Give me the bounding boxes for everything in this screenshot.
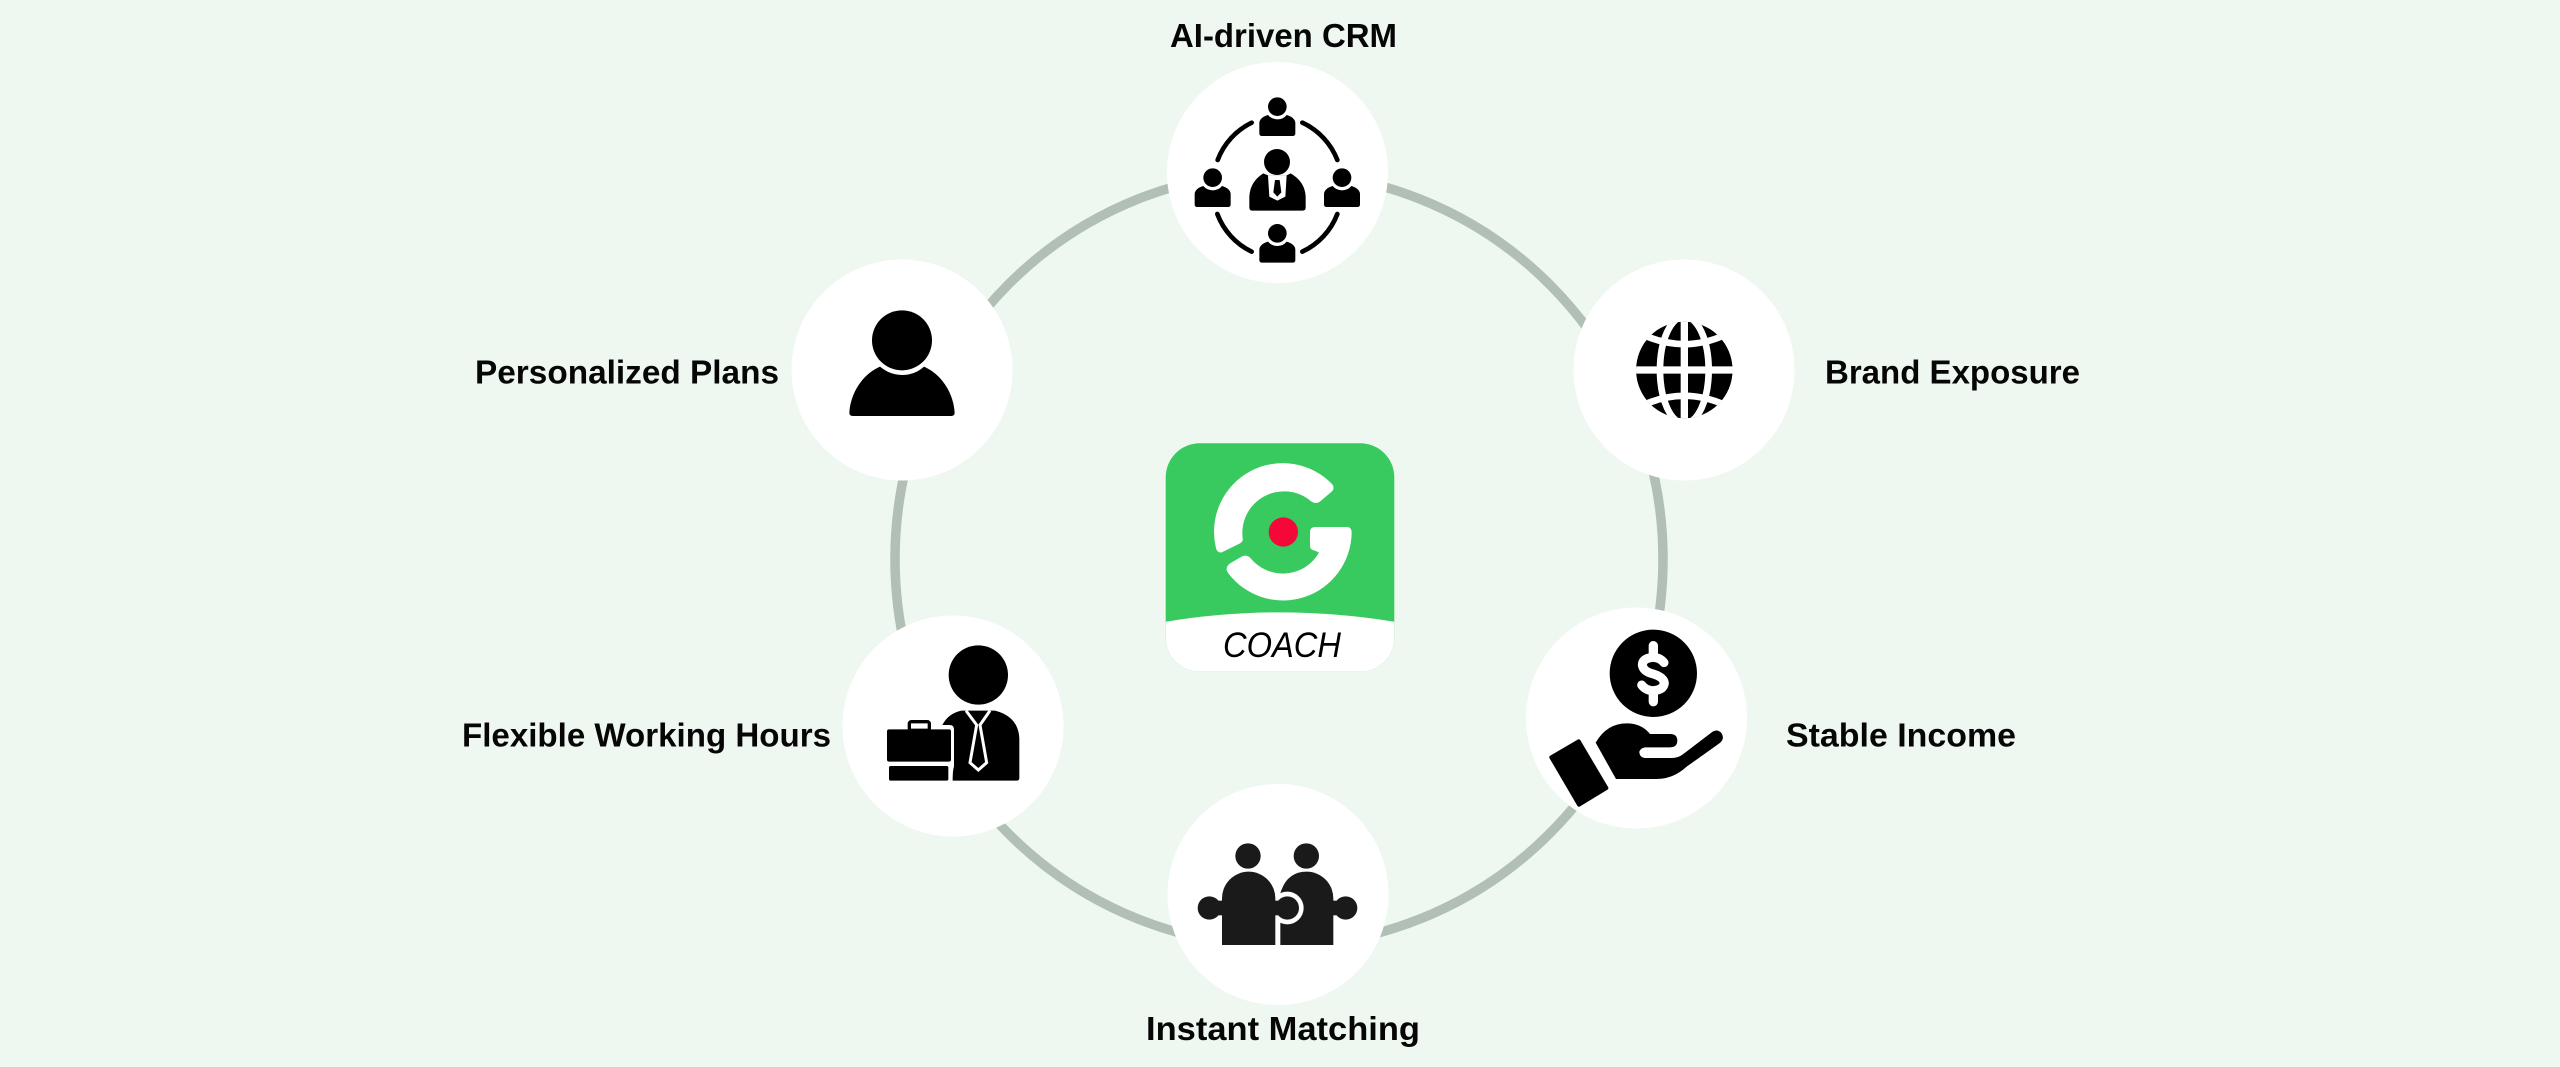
label: Instant Matching: Instant Matching [1146,1010,1420,1047]
circle: Stable Income [1526,608,1747,828]
node: Brand Exposure [1574,260,2080,480]
label: Flexible Working Hours: Flexible Working Hours [462,716,831,754]
node: Stable Income [1526,608,2016,828]
logo text: COACH: COACH [1223,626,1342,665]
connecting ring [895,172,1663,946]
circle: Flexible Working Hours [842,616,1064,836]
circle: AI-driven CRM [1167,62,1388,283]
label: Stable Income: Stable Income [1786,716,2016,754]
node: Personalized Plans [475,260,1012,480]
label: Brand Exposure: Brand Exposure [1825,354,2080,390]
icon: people network [1195,97,1360,263]
icon: hand holding coin [1551,630,1723,805]
node: AI-driven CRM [1167,17,1397,283]
node: Instant Matching [1146,784,1420,1047]
infographic [464,23,2079,1047]
icon: globe [1636,322,1733,418]
logo G mark [1214,463,1352,600]
center logo: COACH app icon [1166,443,1394,672]
icon: puzzle people [1198,843,1357,945]
logo tile [1166,443,1394,672]
icon: person [849,310,955,416]
node: Flexible Working Hours [462,616,1064,836]
label: Personalized Plans: Personalized Plans [475,354,779,390]
circle: Instant Matching [1168,784,1388,1005]
logo white footer [1166,612,1394,672]
icon: businessman with briefcase [887,645,1019,781]
circle: Personalized Plans [792,260,1012,480]
circle: Brand Exposure [1574,260,1794,480]
label: AI-driven CRM: AI-driven CRM [1170,17,1397,54]
